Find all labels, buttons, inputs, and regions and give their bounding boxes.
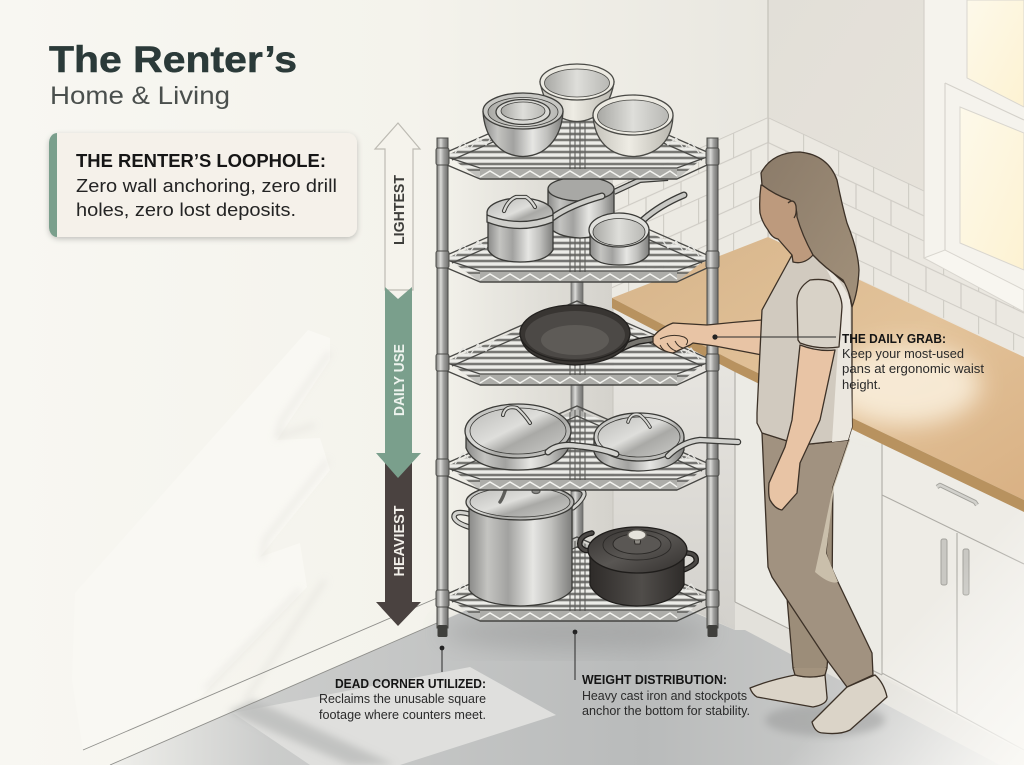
weight arrow: heaviest [376, 462, 421, 626]
callout: dead corner utilized: Reclaims the unusable square [319, 692, 486, 706]
weight arrow: daily use: DAILY USE [392, 344, 408, 416]
weight arrow: daily use [376, 287, 421, 478]
weight arrow: lightest [375, 123, 420, 290]
second shelf [436, 198, 719, 282]
callout card: the renter's loophole: THE RENTER’S LOOPHOLE: [76, 150, 326, 171]
callout: dead corner utilized [319, 646, 486, 722]
reaching arm and hand [653, 320, 762, 355]
frying pan [520, 305, 660, 365]
wall shading behind shelf [440, 170, 613, 610]
callout: weight distribution: anchor the bottom for stability. [582, 704, 750, 718]
stockpot [454, 484, 584, 606]
callout: weight distribution: WEIGHT DISTRIBUTION: [582, 673, 727, 687]
callout: the daily grab: height. [842, 378, 881, 392]
lidded saucepan [487, 196, 602, 262]
callout card: the renter's loophole [49, 133, 357, 237]
neck and face [760, 185, 813, 263]
third shelf [436, 301, 719, 385]
callout: the daily grab [712, 332, 985, 392]
nested steel bowls [483, 93, 563, 156]
cabinet handles [937, 485, 977, 595]
callout: the daily grab: pans at ergonomic waist [842, 362, 985, 376]
weight arrow: lightest: LIGHTEST [392, 175, 408, 245]
front open saucepan [589, 195, 684, 265]
top shelf [436, 95, 719, 179]
callout: dead corner utilized: footage where counters meet. [319, 708, 486, 722]
wood counter [612, 237, 1024, 512]
hanging arm [769, 345, 835, 510]
callout: weight distribution [573, 630, 750, 718]
front leg and sock [762, 433, 887, 734]
back leg and sock [750, 470, 836, 707]
callout: dead corner utilized: DEAD CORNER UTILIZED: [335, 677, 486, 691]
cabinets [720, 365, 1024, 765]
corner wire shelving unit [436, 64, 738, 637]
floor [83, 562, 1000, 765]
small lidded saute pan [594, 413, 738, 471]
hair [761, 152, 859, 307]
bottom shelf [436, 537, 719, 621]
woman reaching for pan [653, 152, 887, 736]
back saucepan [548, 177, 668, 238]
shirt [757, 255, 852, 445]
ear [788, 201, 796, 218]
shelf shadow on floor [442, 614, 712, 650]
title: The Renter’s [49, 39, 297, 80]
right pole [707, 138, 718, 637]
backsplash tiles [612, 117, 1024, 355]
callout: weight distribution: Heavy cast iron and stockpots [582, 689, 747, 703]
sleeve [797, 279, 842, 348]
left pole [437, 138, 448, 637]
right ceramic bowl [593, 95, 673, 156]
large lidded saute pan [465, 404, 571, 470]
cast iron dutch oven [580, 527, 696, 606]
center pole [571, 110, 583, 590]
back ceramic bowl [540, 64, 614, 122]
window [924, 0, 1024, 312]
subtitle: Home & Living [50, 82, 230, 110]
fourth shelf [436, 406, 719, 490]
callout: the daily grab: Keep your most-used [842, 347, 964, 361]
title [49, 39, 297, 110]
wall sunlight patch [72, 330, 330, 750]
floor shadow under feet [765, 704, 885, 736]
callout: the daily grab: THE DAILY GRAB: [842, 332, 946, 346]
callout card: the renter's loophole: holes, zero lost deposits. [76, 199, 296, 220]
weight arrow: heaviest: HEAVIEST [392, 505, 408, 576]
wall below counter [613, 300, 735, 630]
callout card: the renter's loophole: Zero wall anchoring, zero drill [76, 175, 337, 196]
long pan handle [548, 445, 616, 454]
